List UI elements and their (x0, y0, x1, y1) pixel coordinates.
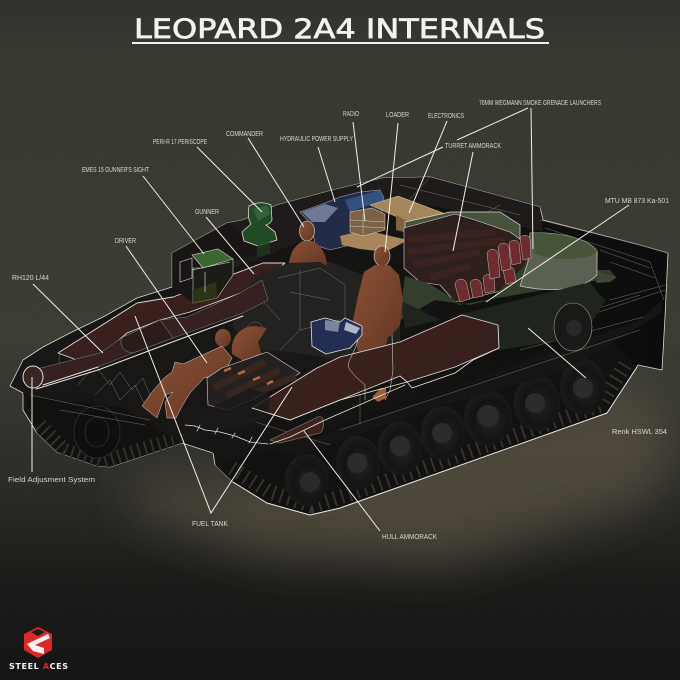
engine compartment (400, 233, 617, 350)
loader (348, 246, 403, 402)
far side track (23, 393, 182, 467)
main gun (23, 280, 268, 389)
turret roof (172, 177, 543, 287)
driver and gunner figures (142, 326, 267, 418)
leader lines (32, 108, 629, 531)
EMES 15 sight (180, 249, 233, 303)
turret ammo rack (404, 214, 530, 302)
labels: LOADER (386, 112, 409, 119)
labels: HYDRAULIC POWER SUPPLY (280, 136, 353, 143)
tank silhouette (10, 177, 668, 515)
title: LEOPARD 2A4 INTERNALS (134, 14, 545, 45)
labels: EMES 15 GUNNER'S SIGHT (82, 167, 150, 174)
labels: ELECTRONICS (428, 113, 464, 120)
labels: DRIVER (115, 238, 136, 245)
road wheels (285, 359, 606, 506)
near side track (215, 330, 637, 515)
labels: Renk HSWL 354 (612, 429, 667, 436)
labels: COMMANDER (226, 131, 263, 138)
labels: GUNNER (195, 209, 219, 216)
logo: Steel Aces: STEEL ACES (9, 662, 68, 671)
hull front ammo rack (185, 352, 300, 444)
tank cutaway illustration (10, 177, 668, 515)
labels: MTU MB 873 Ka-501 (605, 198, 669, 205)
left fuel tank (58, 263, 285, 365)
cut-away outlines (252, 348, 499, 444)
labels: FUEL TANK (192, 521, 228, 528)
blue turret drive (311, 318, 362, 354)
labels: RH120 L/44 (12, 275, 49, 282)
hull side (188, 300, 662, 456)
hull ammo rack (270, 417, 324, 443)
labels: HULL AMMORACK (382, 534, 437, 541)
labels: PERI-R 17 PERISCOPE (153, 139, 207, 146)
sprocket wheel (554, 303, 592, 351)
rear deck wireframe (400, 177, 668, 350)
electronics boxes (340, 196, 443, 252)
labels: 76MM WEGMANN SMOKE GRENADE LAUNCHERS (479, 100, 601, 107)
ground light under tank (130, 380, 680, 565)
icon: red hexagon emblem (24, 627, 52, 658)
labels: TURRET AMMORACK (445, 143, 501, 150)
right fuel tank (252, 315, 499, 420)
labels: RADIO (343, 111, 359, 118)
sight mount cut-out (172, 223, 262, 303)
logo: Steel Aces (9, 627, 68, 671)
front glacis wireframe (23, 260, 340, 443)
commander (289, 221, 327, 266)
olive deck (405, 212, 520, 250)
blue hydraulic power supply (300, 190, 384, 250)
smoke grenade launchers (455, 235, 531, 302)
PERI-R 17 periscope (242, 203, 277, 257)
turret cutaway (232, 262, 400, 360)
labels: Field Adjusment System (8, 477, 95, 484)
labels (8, 100, 669, 541)
